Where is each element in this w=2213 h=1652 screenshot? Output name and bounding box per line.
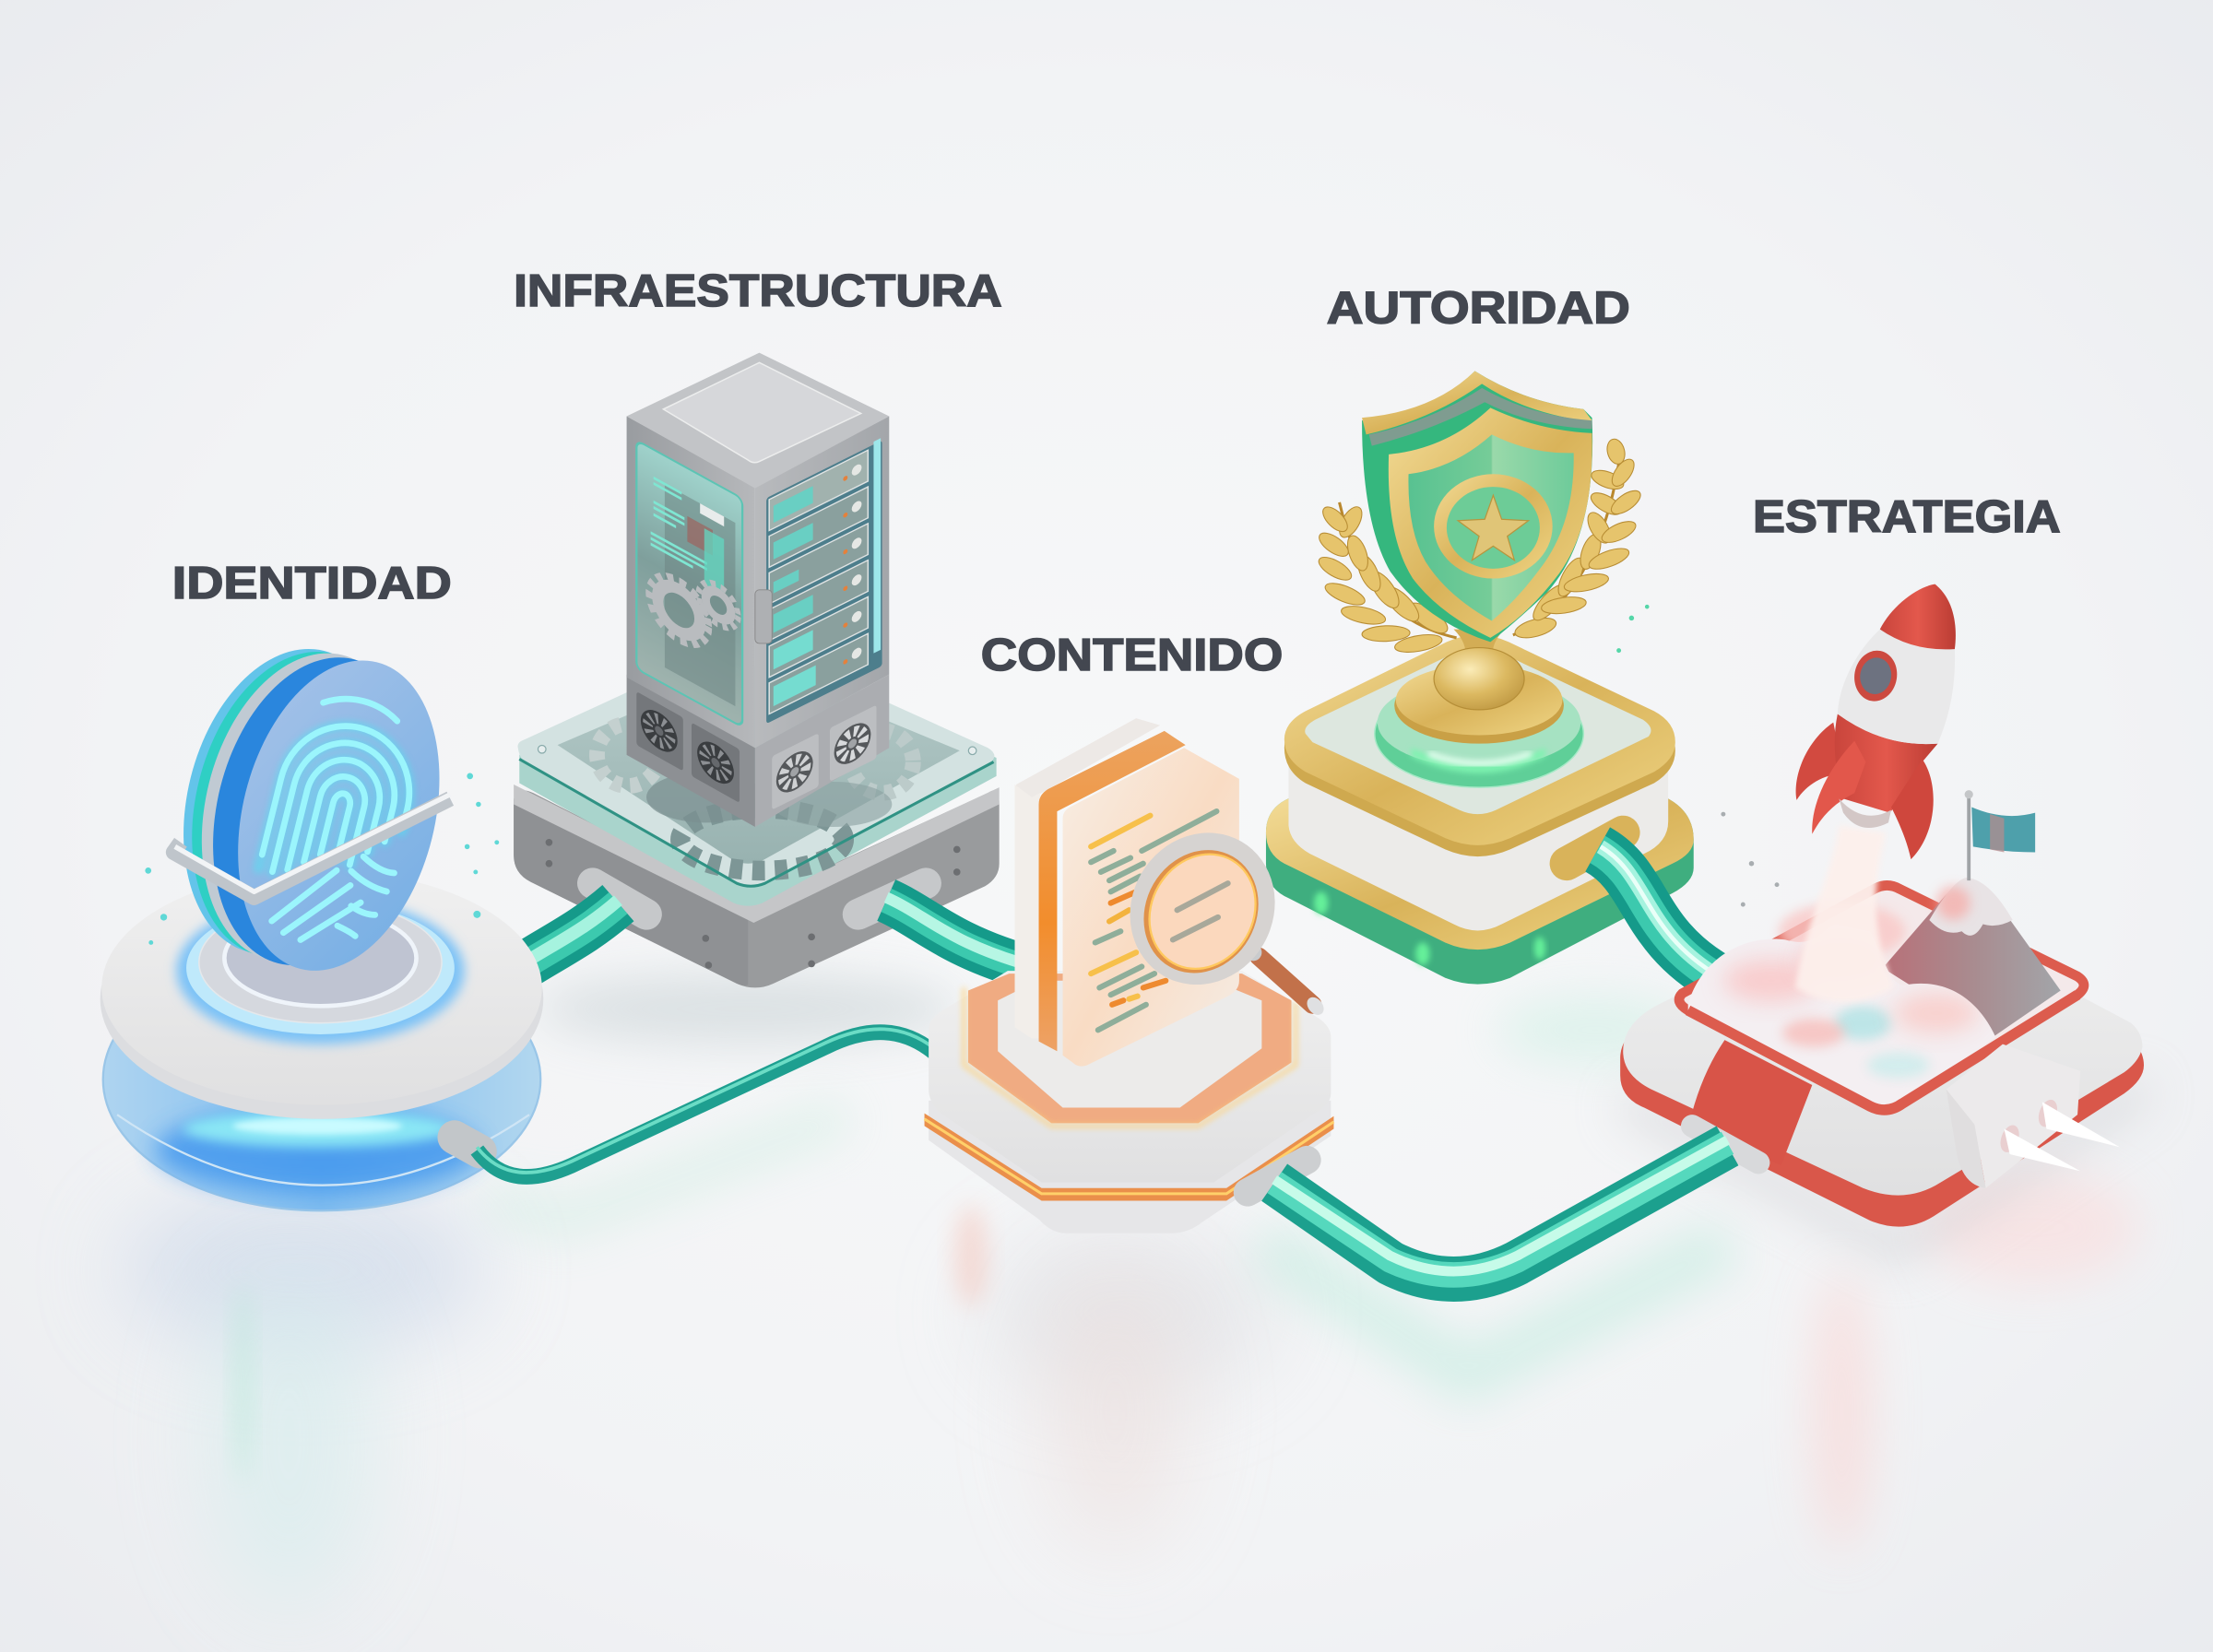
pipe: identidad to contenido	[477, 1029, 934, 1176]
red clamp strap	[1689, 1040, 1812, 1165]
label: contenido: CONTENIDO	[981, 631, 1283, 680]
fingerprint disc	[166, 649, 454, 971]
pipe: contenido to estrategia	[1274, 1140, 1727, 1280]
debris particles	[1721, 812, 1779, 907]
laurel left	[1316, 502, 1457, 655]
connector	[1248, 1160, 1307, 1192]
sparkle particles	[1616, 605, 1650, 653]
shield	[1362, 372, 1592, 642]
node: estrategia	[1620, 584, 2144, 1227]
server fan box	[627, 675, 889, 827]
left glass door with gears	[636, 441, 742, 727]
label: infraestructura: INFRAESTRUCTURA	[514, 266, 1002, 316]
pipe: identidad to infraestructura	[525, 901, 618, 965]
pipe: infraestructura to contenido	[886, 897, 1019, 965]
pipe: autoridad to estrategia	[1598, 846, 1719, 979]
red tray with mountain and cloud	[1679, 878, 2084, 1122]
gold top plate	[1284, 635, 1675, 856]
rocket	[1796, 584, 1956, 859]
floor reflections and shadows	[120, 974, 2146, 1609]
platform	[1620, 891, 2144, 1227]
laurel right	[1513, 437, 1644, 642]
green glass pedestal	[1375, 665, 1583, 787]
document text lines	[1091, 811, 1216, 1030]
lower green glass plate	[1266, 797, 1694, 985]
node: identidad	[101, 627, 543, 1210]
node: autoridad	[1266, 372, 1719, 985]
document panes	[1015, 718, 1239, 1067]
base: gray concrete block	[514, 785, 1000, 987]
trophy stem	[1434, 630, 1524, 710]
base: glass disc	[103, 949, 540, 1210]
flag	[1965, 790, 2035, 880]
sparkle particles	[145, 773, 499, 945]
star	[1458, 495, 1529, 560]
octagon base	[925, 971, 1333, 1233]
server cabinet	[627, 353, 889, 748]
label: estrategia: ESTRATEGIA	[1753, 492, 2061, 542]
magnifier	[1103, 807, 1327, 1018]
connector	[455, 1138, 479, 1151]
glass plate with gears	[518, 638, 997, 906]
connector	[1692, 1126, 1758, 1162]
node: infraestructura	[514, 353, 1000, 987]
mountain	[1883, 878, 2061, 1037]
gold socket	[1567, 832, 1623, 864]
label: identidad: IDENTIDAD	[172, 559, 452, 608]
thruster block	[1947, 1044, 2120, 1188]
metal bracket	[173, 798, 450, 897]
node: contenido	[925, 718, 1333, 1233]
label: autoridad: AUTORIDAD	[1327, 284, 1630, 334]
base: white ring	[101, 870, 543, 1119]
right rack with slots	[766, 437, 882, 724]
exhaust plume	[1795, 825, 1894, 1002]
white body	[1288, 762, 1668, 930]
sockets on block	[593, 883, 926, 914]
smoke cloud	[1687, 938, 1995, 1082]
